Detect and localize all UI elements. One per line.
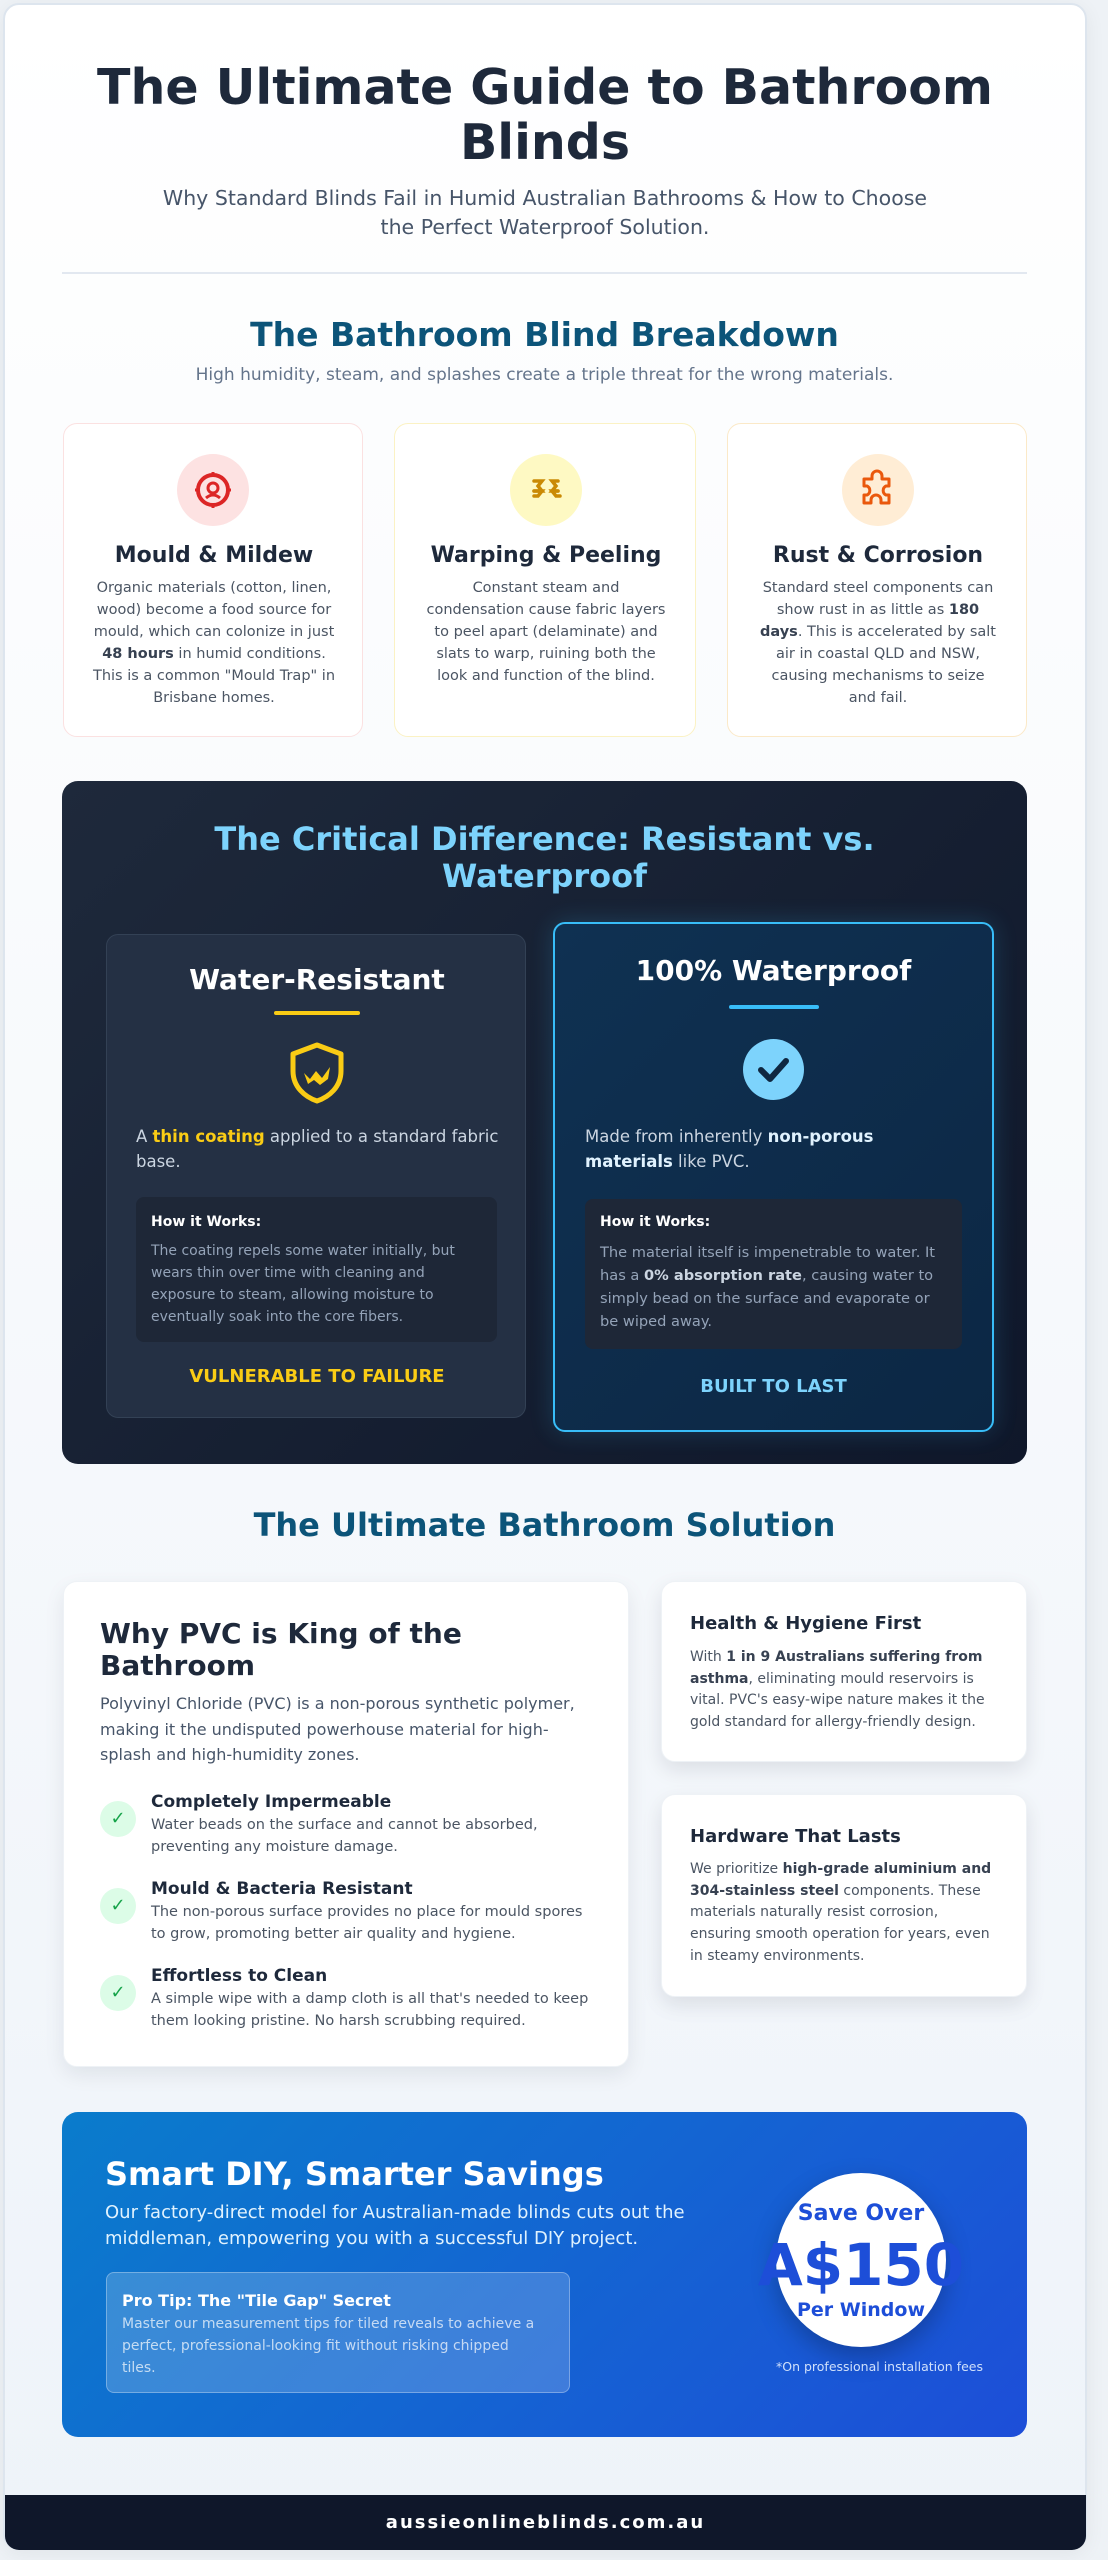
- text: With 1 in 9 Australians suffering from asthma, eliminating mould reservoirs is vital. PVC's easy-wipe nature makes it the gold standard for allergy-friendly design.: [690, 1649, 985, 1730]
- footnote: *On professional installation fees: [776, 2359, 983, 2374]
- panel: why pvc: [63, 1581, 629, 2067]
- badge: save A$150: Save Over: [798, 2201, 924, 2226]
- badge: save A$150: [776, 2173, 946, 2347]
- box: how it works: [136, 1197, 497, 1342]
- label: VULNERABLE TO FAILURE: [189, 1366, 445, 1387]
- subtitle: Why Standard Blinds Fail in Humid Australian Bathrooms & How to Choose the Perfect Waterproof Solution.: [163, 186, 927, 239]
- item: mould resistant: [100, 1879, 582, 1942]
- heading: Warping & Peeling: [431, 543, 661, 568]
- item: impermeable: Completely Impermeable: [151, 1792, 391, 1812]
- panel: hardware: [661, 1794, 1027, 1997]
- badge: save A$150: Per Window: [797, 2299, 925, 2321]
- icon: broken shield: [290, 1042, 344, 1104]
- item: impermeable: ✓: [110, 1808, 126, 1829]
- text: A thin coating applied to a standard fabric base.: [136, 1127, 498, 1171]
- icon: warping: [510, 454, 582, 526]
- icon: mould: [177, 454, 249, 526]
- label: BUILT TO LAST: [700, 1376, 847, 1397]
- item: easy clean: [100, 1966, 588, 2029]
- heading: Why PVC is King of the Bathroom: [100, 1617, 462, 1682]
- panel: critical difference: [62, 781, 1027, 1464]
- heading: Hardware That Lasts: [690, 1826, 901, 1847]
- heading: Water-Resistant: [189, 963, 445, 996]
- item: easy clean: ✓: [110, 1982, 126, 2003]
- item: mould resistant: ✓: [110, 1895, 126, 1916]
- heading: 100% Waterproof: [636, 954, 911, 987]
- text: Standard steel components can show rust in as little as 180 days. This is accelerated by salt air in coastal QLD and NSW, causing mechanisms to seize and fail.: [760, 580, 996, 706]
- text: We prioritize high-grade aluminium and 304-stainless steel components. These materials naturally resist corrosion, ensuring smooth operation for years, even in steamy environments.: [690, 1861, 991, 1964]
- icon: check circle: [743, 1039, 804, 1100]
- panel: DIY savings: [62, 2112, 1027, 2437]
- item: impermeable: [100, 1792, 538, 1855]
- card: waterproof: [553, 922, 994, 1432]
- callout: pro tip: Pro Tip: The "Tile Gap" Secret: [122, 2291, 391, 2310]
- heading: breakdown: The Bathroom Blind Breakdown: [250, 315, 839, 354]
- heading: The Critical Difference: Resistant vs. Waterproof: [214, 820, 875, 895]
- box: how it works: How it Works:: [600, 1214, 710, 1230]
- paragraph: Our factory-direct model for Australian-made blinds cuts out the middleman, empowering you with a successful DIY project.: [105, 2202, 685, 2248]
- heading: Mould & Mildew: [115, 543, 313, 568]
- heading: Health & Hygiene First: [690, 1613, 921, 1634]
- box: how it works: How it Works:: [151, 1214, 261, 1230]
- box: how it works: The coating repels some water initially, but wears thin over time with cleaning and exposure to steam, allowing moisture to eventually soak into the core fibers.: [151, 1243, 455, 1325]
- callout: pro tip: Master our measurement tips for tiled reveals to achieve a perfect, professional-looking fit without risking chipped tiles.: [122, 2316, 534, 2376]
- panel: mould card: [63, 423, 363, 737]
- box: how it works: [585, 1199, 962, 1349]
- item: mould resistant: Mould & Bacteria Resistant: [151, 1879, 413, 1899]
- footer: [5, 2495, 1086, 2550]
- title: The Ultimate Guide to Bathroom Blinds: [97, 59, 993, 171]
- heading: Rust & Corrosion: [773, 543, 983, 568]
- breakdown subtitle: High humidity, steam, and splashes create a triple threat for the wrong materials.: [196, 365, 893, 385]
- icon: rust: [842, 454, 914, 526]
- panel: health: [661, 1581, 1027, 1762]
- panel: rust card: [727, 423, 1027, 737]
- item: impermeable: Water beads on the surface and cannot be absorbed, preventing any moisture damage.: [151, 1817, 538, 1855]
- text: Constant steam and condensation cause fabric layers to peel apart (delaminate) and slats to warp, ruining both the look and function of the blind.: [426, 580, 666, 684]
- item: easy clean: Effortless to Clean: [151, 1966, 327, 1986]
- item: mould resistant: The non-porous surface provides no place for mould spores to grow, promoting better air quality and hygiene.: [151, 1904, 582, 1942]
- text: Organic materials (cotton, linen, wood) become a food source for mould, which can colonize in just 48 hours in humid conditions. This is a common "Mould Trap" in Brisbane homes.: [93, 580, 335, 706]
- item: easy clean: A simple wipe with a damp cloth is all that's needed to keep them looking pristine. No harsh scrubbing required.: [151, 1991, 588, 2029]
- card: water-resistant: [106, 934, 526, 1418]
- footer: aussieonlineblinds.com.au: [386, 2512, 705, 2533]
- text: Made from inherently non-porous materials like PVC.: [585, 1127, 873, 1171]
- heading: Smart DIY, Smarter Savings: [105, 2155, 604, 2193]
- callout: pro tip: [106, 2272, 570, 2393]
- panel: warping card: [394, 423, 696, 737]
- badge: save A$150: A$150: [758, 2231, 964, 2299]
- heading: solution: The Ultimate Bathroom Solution: [254, 1506, 835, 1544]
- paragraph: Polyvinyl Chloride (PVC) is a non-porous synthetic polymer, making it the undisputed powerhouse material for high-splash and high-humidity zones.: [100, 1694, 575, 1764]
- box: how it works: The material itself is impenetrable to water. It has a 0% absorption rate, causing water to simply bead on the surface and evaporate or be wiped away.: [600, 1244, 935, 1330]
